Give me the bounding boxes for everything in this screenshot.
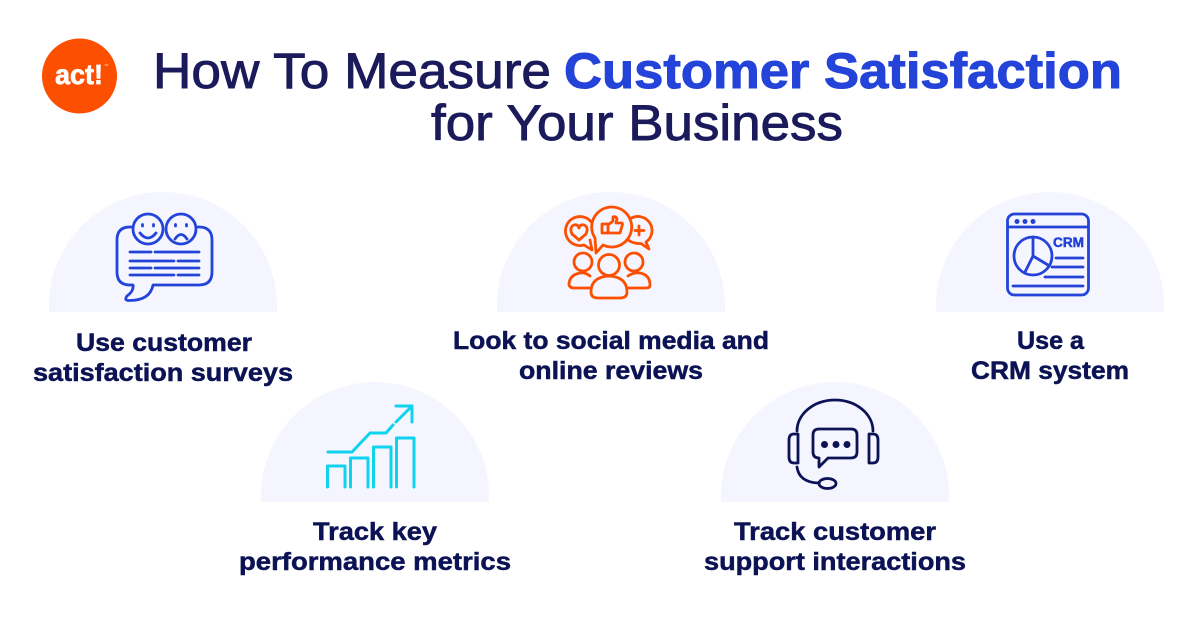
semicircle background — [497, 192, 725, 312]
label: Track customer — [734, 518, 936, 546]
label: Use a — [1017, 327, 1085, 355]
logo: act!: ™ — [104, 63, 108, 68]
icon: support headset with chat bubble — [789, 400, 878, 488]
title — [153, 43, 1122, 151]
title: for Your Business — [431, 95, 843, 151]
label — [33, 329, 293, 387]
label: Use customer — [76, 329, 252, 357]
panel: customer satisfaction surveys — [33, 192, 293, 387]
semicircle background — [721, 382, 949, 502]
label: support interactions — [704, 548, 966, 576]
label: online reviews — [519, 357, 703, 385]
logo: act! — [42, 38, 117, 114]
label: Look to social media and — [453, 327, 769, 355]
label: Track key — [313, 518, 437, 546]
title: Customer Satisfaction — [564, 43, 1122, 99]
semicircle background — [49, 192, 277, 312]
label — [239, 518, 511, 576]
icon: CRM browser window — [1008, 214, 1088, 295]
label: CRM system — [971, 357, 1129, 385]
label — [704, 518, 966, 576]
icon: people with reaction bubbles — [565, 207, 652, 298]
label — [971, 327, 1129, 385]
icon: CRM browser window: CRM — [1053, 235, 1084, 250]
icon: growth bar chart with arrow — [328, 406, 414, 487]
semicircle background — [261, 382, 489, 502]
panel: social media and online reviews — [453, 192, 769, 385]
label: satisfaction surveys — [33, 359, 293, 387]
panel: CRM system — [936, 192, 1164, 385]
panel: customer support interactions — [704, 382, 966, 576]
semicircle background — [936, 192, 1164, 312]
panel: key performance metrics — [239, 382, 511, 576]
logo: act!: act! — [55, 59, 103, 90]
label: performance metrics — [239, 548, 511, 576]
title: How To Measure — [153, 43, 551, 99]
label — [453, 327, 769, 385]
icon: survey speech bubble with faces — [117, 214, 212, 301]
